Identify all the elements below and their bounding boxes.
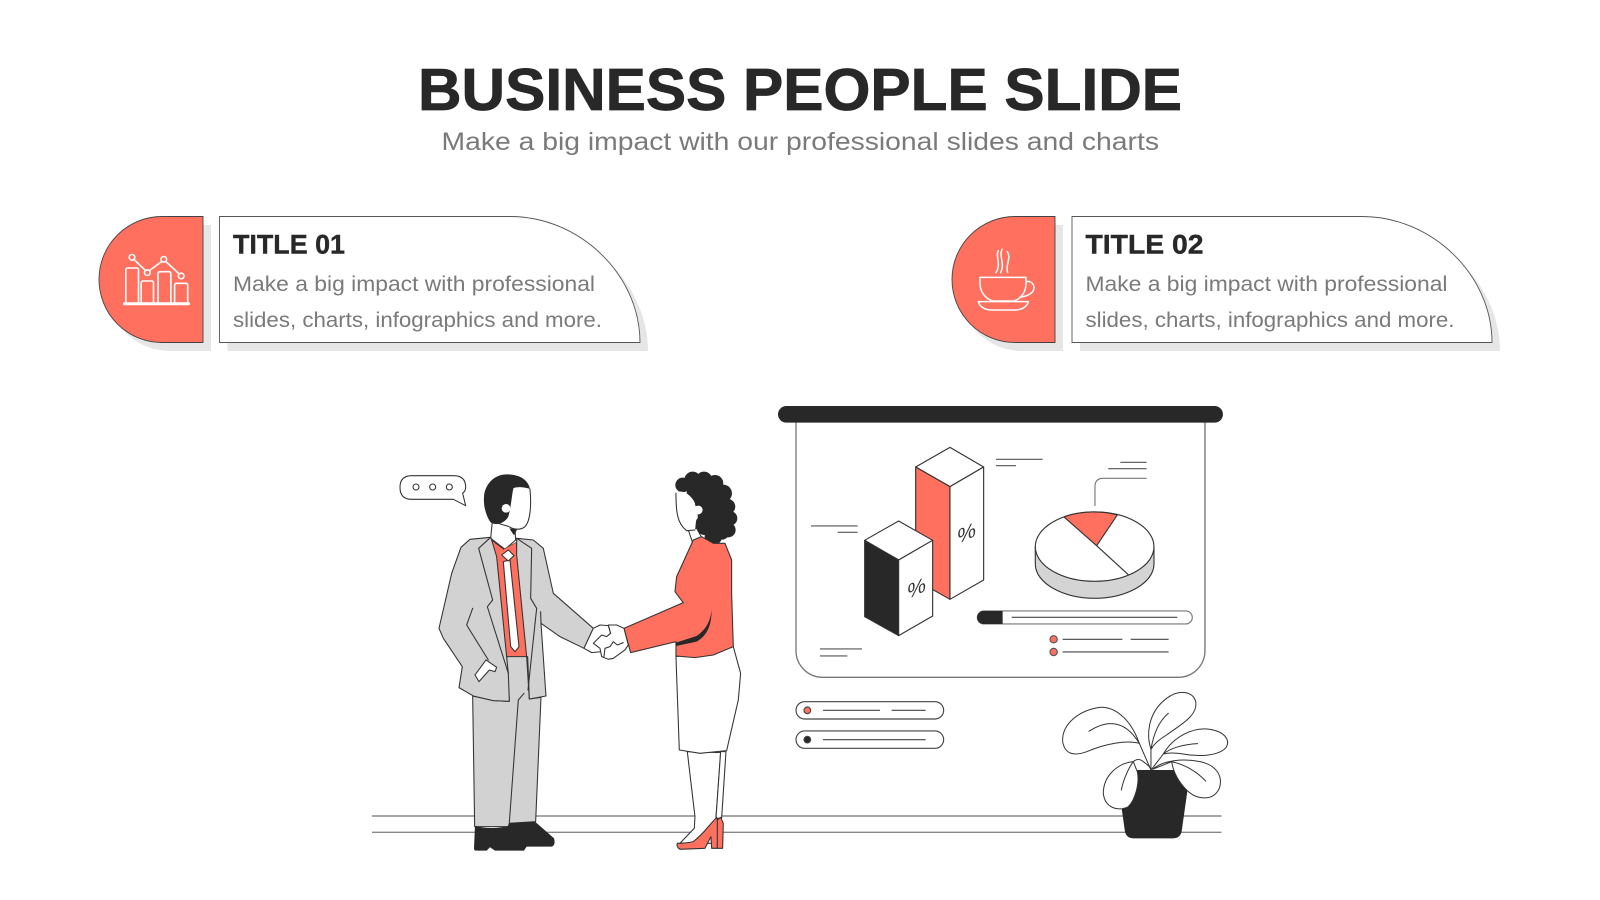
chart label lines	[811, 459, 1147, 656]
panel: title 02	[952, 216, 1500, 351]
pills below the board	[796, 702, 944, 748]
panel: title 01	[99, 216, 648, 351]
card: title 02 text: Make a big impact with professional	[1086, 273, 1448, 296]
presentation board	[778, 406, 1223, 677]
woman in coral top	[624, 472, 741, 849]
handshake	[584, 625, 628, 659]
man in grey suit	[439, 474, 593, 851]
plant in black pot	[1063, 692, 1228, 838]
progress bar	[977, 611, 1192, 624]
card: title 01 text: Make a big impact with professional	[233, 273, 595, 296]
people shaking hands	[400, 472, 741, 851]
card: title 02 text: slides, charts, infographics and more.	[1086, 309, 1454, 332]
pie chart	[1035, 478, 1154, 598]
icon: bar chart on coral badge	[99, 216, 203, 342]
bar chart: isometric percent bars: %	[907, 572, 926, 604]
ground lines	[372, 816, 1222, 832]
card: title 02 text: TITLE 02	[1086, 230, 1204, 260]
bar chart: isometric percent bars: %	[957, 517, 976, 549]
speech bubble	[400, 476, 466, 506]
title: BUSINESS PEOPLE SLIDE	[418, 57, 1182, 123]
subtitle: Make a big impact with our professional slides and charts	[442, 128, 1159, 156]
card: title 01 text	[220, 216, 640, 342]
icon: coffee cup on coral badge	[952, 216, 1055, 342]
bar chart: isometric percent bars	[865, 447, 984, 636]
board legend	[1050, 636, 1169, 656]
card: title 02 text	[1072, 216, 1492, 342]
card: title 01 text: slides, charts, infographics and more.	[233, 309, 602, 332]
card: title 01 text: TITLE 01	[233, 230, 345, 260]
